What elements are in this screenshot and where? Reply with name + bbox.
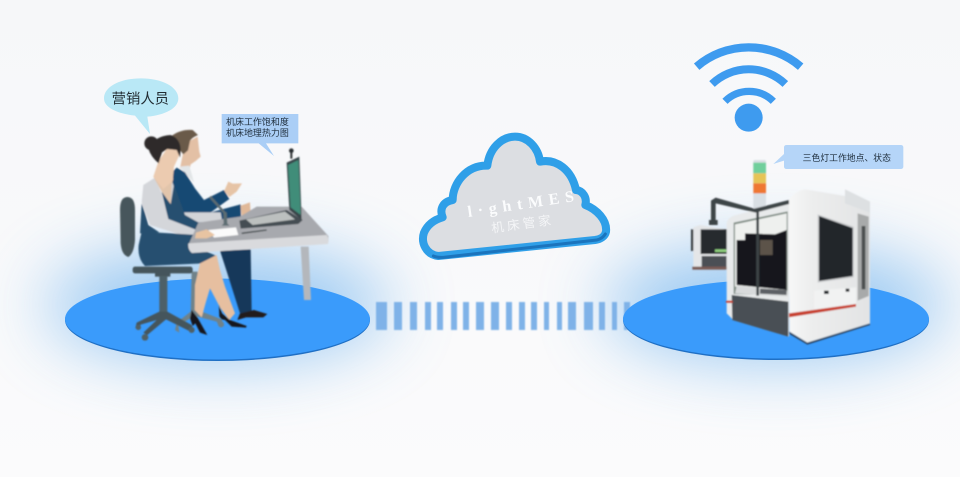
woman: torso	[140, 177, 222, 240]
left blue platform	[65, 278, 370, 361]
tooltip: tower light: 三色灯工作地点、状态	[803, 152, 891, 163]
people at the desk	[120, 130, 328, 341]
hand and paper	[195, 227, 267, 238]
machine body front	[727, 201, 789, 337]
microphone	[210, 197, 230, 226]
laptop	[239, 157, 303, 229]
right blue platform	[623, 280, 929, 360]
overhead arm and pole	[709, 198, 789, 296]
woman: skirt	[138, 232, 217, 266]
control panel	[691, 225, 730, 270]
front window	[734, 211, 788, 297]
machine body side	[788, 189, 870, 345]
tooltip: utilization and heat map: 机床地理热力图	[226, 127, 289, 138]
side window	[818, 214, 854, 283]
data transfer bars	[376, 302, 630, 330]
cloud subtitle: 机床管家	[490, 212, 552, 236]
desk top	[188, 207, 328, 253]
red accent line	[789, 304, 856, 317]
tower light	[753, 160, 766, 210]
speech bubble: sales staff	[104, 78, 178, 134]
woman: legs and heels	[190, 255, 247, 335]
tooltip: utilization and heat map	[222, 114, 298, 156]
machine lower base	[732, 295, 788, 337]
drawer vents	[824, 289, 849, 294]
woman: head	[144, 135, 181, 189]
webcam	[289, 148, 294, 159]
man: legs and shoes	[220, 249, 267, 320]
speech bubble: sales staff: 营销人员	[112, 90, 169, 107]
tooltip: tower light	[773, 145, 903, 169]
man: suit and arm	[169, 168, 251, 231]
wifi icon	[697, 47, 801, 132]
side strip	[858, 213, 869, 301]
CNC machine	[691, 160, 870, 345]
red accent left	[726, 301, 733, 303]
man: head	[171, 130, 201, 182]
desk leg	[301, 247, 311, 300]
cloud	[423, 137, 606, 257]
tooltip: utilization and heat map: 机床工作饱和度	[226, 116, 289, 127]
chair	[120, 197, 224, 341]
cloud logo text: l·ghtMES	[466, 188, 575, 221]
